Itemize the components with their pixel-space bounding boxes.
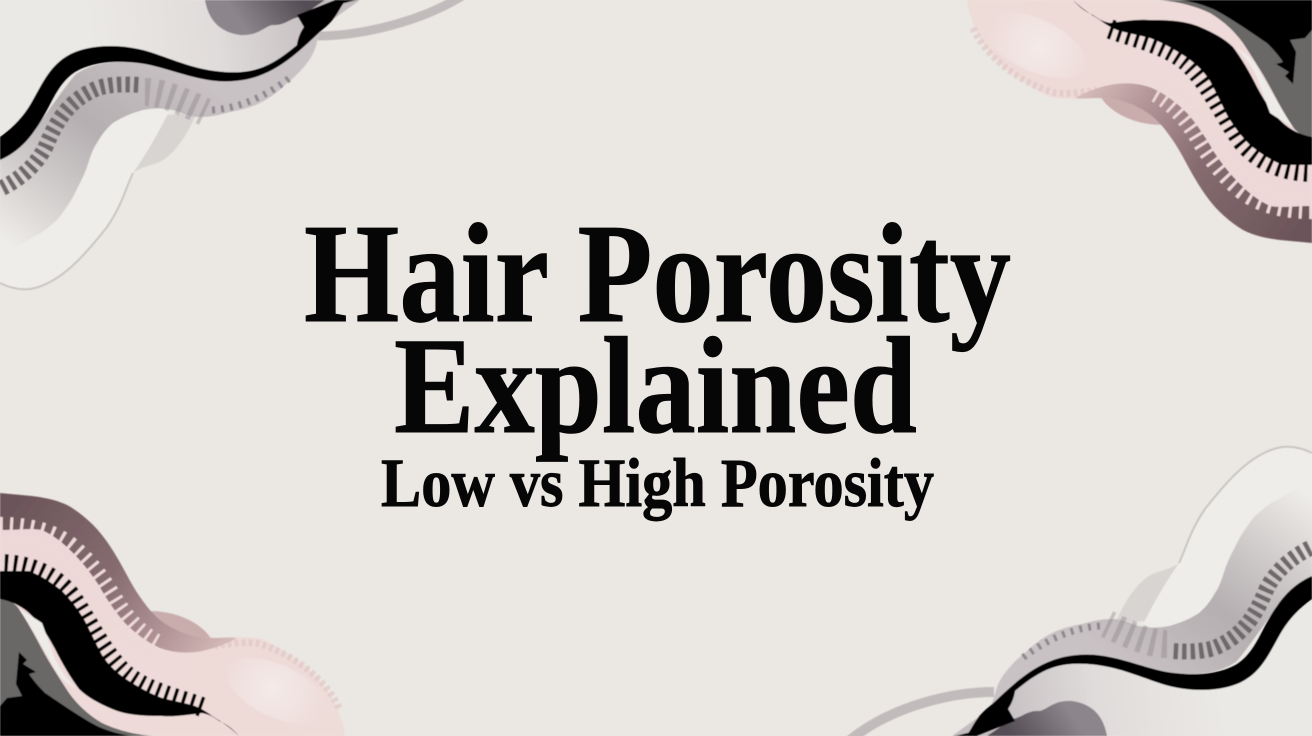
back lobe [1100, 96, 1162, 125]
faint upper rim [973, 28, 1097, 93]
teeth below band [2, 84, 140, 188]
teeth below band [1172, 548, 1310, 652]
grey streak band [0, 599, 152, 736]
edge teeth [1020, 626, 1100, 660]
white streak [1237, 48, 1293, 127]
black band [954, 576, 1312, 736]
dark blob [987, 701, 1107, 736]
black teeth [1110, 29, 1312, 172]
dark rim [0, 493, 237, 653]
decorative wave: bottom right [850, 447, 1312, 736]
thin ring [318, 0, 462, 36]
back lobe [1115, 563, 1192, 624]
paper wash above band [0, 0, 360, 135]
edge teeth [212, 76, 292, 110]
decorative wave: top right [967, 0, 1312, 243]
back lobe [150, 611, 212, 640]
white lobe [1140, 447, 1312, 636]
lobe edge [1179, 447, 1312, 563]
title line 1: Hair Porosity [304, 194, 1011, 352]
upper black mass [0, 652, 132, 736]
lobe edge [0, 173, 133, 289]
light teeth on rim [0, 530, 154, 646]
pink body [0, 493, 345, 736]
black band [1073, 0, 1312, 165]
white streak [19, 609, 75, 688]
black band [0, 0, 358, 160]
black blob [967, 707, 1015, 736]
grey body band [987, 484, 1312, 714]
black teeth [0, 564, 202, 707]
title line 2: Explained [394, 309, 917, 462]
faint upper rim [215, 643, 339, 708]
grey body band [0, 22, 325, 252]
pink body [967, 0, 1312, 243]
white lobe [0, 100, 172, 289]
decorative wave: top left [0, 0, 462, 289]
dark rim [1075, 83, 1312, 243]
upper black mass [1180, 0, 1312, 84]
faint streaks [1107, 624, 1167, 644]
light teeth on rim [1158, 90, 1312, 206]
black blob [297, 0, 345, 29]
dark blob [205, 0, 325, 35]
paper wash above band [952, 601, 1312, 736]
decorative wave: bottom left [0, 493, 345, 736]
black band [0, 571, 239, 736]
faint streaks [145, 92, 205, 112]
grey streak band [1160, 0, 1312, 137]
highlight [216, 644, 338, 736]
subtitle: Low vs High Porosity [381, 445, 934, 521]
highlight [974, 0, 1096, 92]
back lobe [120, 112, 197, 173]
title [304, 194, 1011, 462]
thin ring [850, 692, 994, 736]
